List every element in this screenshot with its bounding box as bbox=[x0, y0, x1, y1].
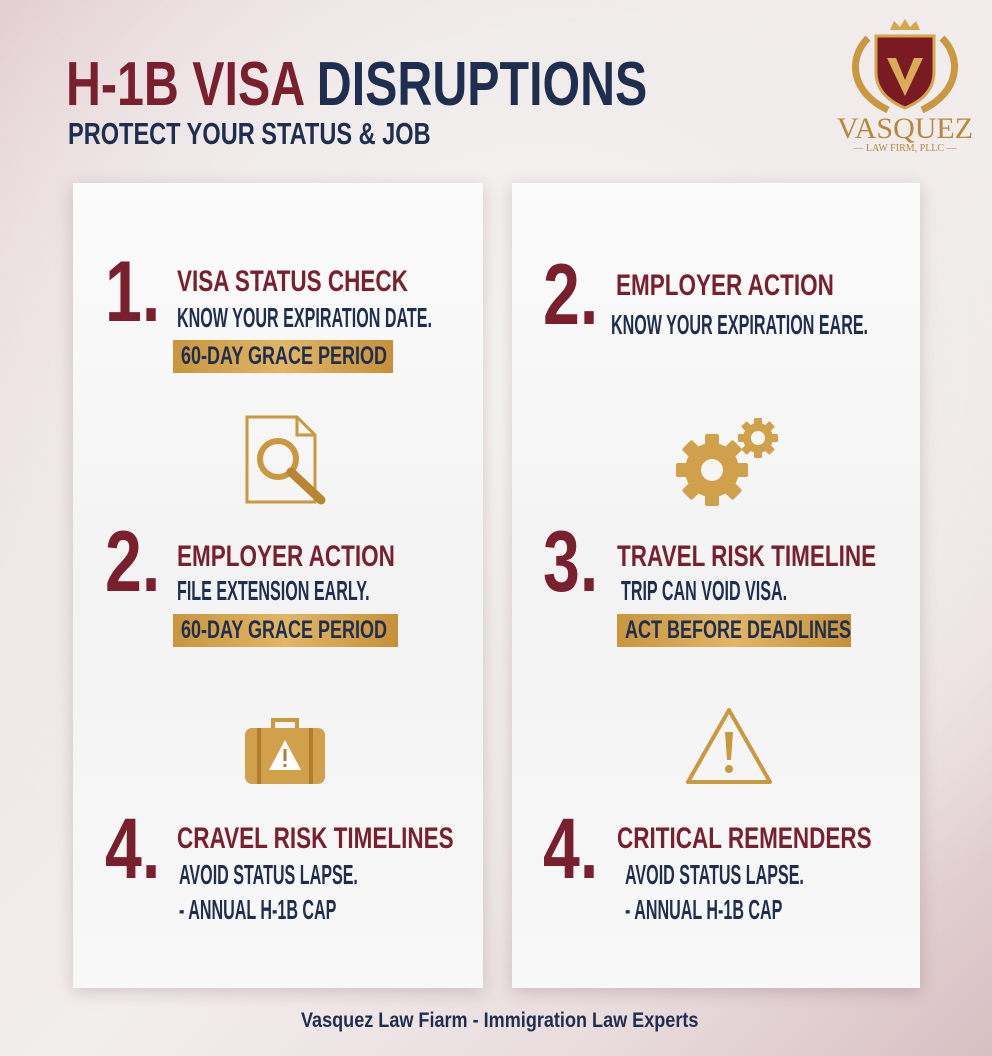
item: right 3 bbox=[543, 514, 876, 647]
item: left 4: AVOID STATUS LAPSE. bbox=[179, 859, 358, 890]
item: left 1: 1. bbox=[105, 244, 160, 340]
item: left 1: VISA STATUS CHECK bbox=[177, 265, 408, 298]
logo: VASQUEZ bbox=[837, 112, 973, 145]
icon: gears bbox=[676, 418, 778, 506]
item: right 2 bbox=[543, 247, 868, 343]
subtitle: PROTECT YOUR STATUS & JOB bbox=[68, 116, 431, 151]
title: H-1B VISA DISRUPTIONS bbox=[66, 50, 647, 119]
item: right 4: AVOID STATUS LAPSE. bbox=[625, 859, 804, 890]
item: left 2: 60-DAY GRACE PERIOD bbox=[181, 616, 387, 644]
item: left 2 bbox=[105, 514, 398, 647]
item: left 4: CRAVEL RISK TIMELINES bbox=[177, 822, 454, 855]
item: right 4 bbox=[543, 801, 872, 925]
item: left 1: 60-DAY GRACE PERIOD bbox=[181, 342, 387, 370]
item: left 2: 2. bbox=[105, 514, 160, 610]
item: right 3: TRIP CAN VOID VISA. bbox=[621, 575, 787, 606]
item: left 1 bbox=[105, 244, 432, 373]
logo: — LAW FIRM, PLLC — bbox=[853, 143, 957, 154]
icon: document search bbox=[246, 416, 326, 504]
panel: left bbox=[73, 183, 483, 988]
footer: Vasquez Law Fiarm - Immigration Law Experts bbox=[301, 1009, 698, 1032]
item: right 2: KNOW YOUR EXPIRATION EARE. bbox=[611, 309, 868, 340]
icon: warning bbox=[686, 708, 772, 784]
item: right 3: 3. bbox=[543, 514, 598, 610]
item: right 4: 4. bbox=[543, 801, 598, 897]
logo bbox=[837, 19, 973, 154]
item: right 4: CRITICAL REMENDERS bbox=[617, 822, 872, 855]
item: right 2: EMPLOYER ACTION bbox=[616, 269, 834, 302]
item: left 4: - ANNUAL H-1B CAP bbox=[179, 894, 336, 925]
item: left 1: KNOW YOUR EXPIRATION DATE. bbox=[177, 302, 432, 333]
icon: suitcase warning bbox=[245, 718, 325, 784]
item: left 2: EMPLOYER ACTION bbox=[177, 540, 395, 573]
item: right 3: TRAVEL RISK TIMELINE bbox=[617, 540, 876, 573]
item: right 2: 2. bbox=[543, 247, 598, 343]
item: left 4: 4. bbox=[105, 801, 160, 897]
item: left 4 bbox=[105, 801, 454, 925]
item: right 3: ACT BEFORE DEADLINES bbox=[625, 616, 851, 644]
panel: right bbox=[512, 183, 920, 988]
item: left 2: FILE EXTENSION EARLY. bbox=[177, 575, 370, 606]
item: right 4: - ANNUAL H-1B CAP bbox=[625, 894, 782, 925]
